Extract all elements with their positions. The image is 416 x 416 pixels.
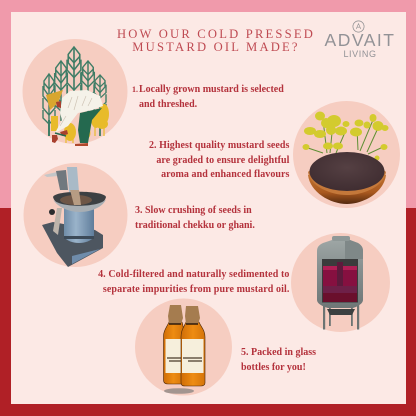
title: MUSTARD OIL MADE?	[132, 40, 300, 54]
panel: step 1 illustration farmer	[22, 39, 128, 146]
text: step 1: and threshed.	[139, 99, 197, 110]
text: step 2: are graded to ensure delightful	[156, 155, 290, 166]
text: step 4: 4. Cold-filtered and naturally sedimented to	[98, 269, 290, 280]
panel: step 4 illustration filter tank	[291, 233, 390, 332]
press top	[44, 167, 79, 192]
press bowl	[53, 192, 106, 210]
text: step 1	[132, 84, 284, 110]
bowl	[308, 175, 386, 204]
text: step 3	[135, 205, 255, 231]
shirt	[55, 90, 103, 133]
text: step 2: 2. Highest quality mustard seeds	[149, 140, 290, 151]
text: step 2: aroma and enhanced flavours	[161, 169, 290, 180]
text: step 5	[241, 347, 316, 373]
text: step 5: 5. Packed in glass	[241, 347, 316, 358]
trousers	[78, 108, 102, 143]
panel: step 3 image stone press	[24, 163, 128, 267]
side knob	[49, 209, 55, 215]
bottle left	[164, 305, 183, 384]
cylinder	[64, 205, 94, 243]
panel: step 2 image mustard seeds bowl	[293, 101, 400, 208]
logo: Advait Living: LIVING	[343, 49, 377, 59]
logo: Advait Living: ADVAIT	[325, 30, 395, 50]
yellow wheat	[51, 104, 109, 141]
background: lower red band	[0, 208, 416, 416]
text: step 4	[98, 269, 290, 295]
text: step 2	[149, 140, 290, 180]
wheat stalks	[43, 47, 106, 136]
text: step 1: 1.Locally grown mustard is selected	[132, 84, 284, 95]
title: HOW OUR COLD PRESSED	[117, 26, 315, 40]
text: step 5: bottles for you!	[241, 362, 306, 373]
panel: step 5 image bottles	[135, 298, 232, 396]
text: step 3: traditional chekku or ghani.	[135, 220, 255, 231]
shoe	[75, 143, 88, 146]
bottle shadow	[164, 388, 194, 394]
logo: Advait Living	[324, 20, 395, 59]
text: step 4: separate impurities from pure mustard oil.	[103, 284, 290, 295]
hat	[46, 90, 63, 110]
tank body	[317, 240, 363, 308]
hands	[52, 130, 68, 143]
mustard plants	[305, 120, 383, 154]
title	[117, 26, 315, 54]
machine base	[42, 222, 103, 267]
seeds	[310, 152, 384, 191]
text: step 3: 3. Slow crushing of seeds in	[135, 205, 252, 216]
tank legs	[323, 304, 359, 330]
tank window	[322, 259, 358, 302]
face	[56, 101, 61, 108]
bottle right	[181, 306, 205, 386]
